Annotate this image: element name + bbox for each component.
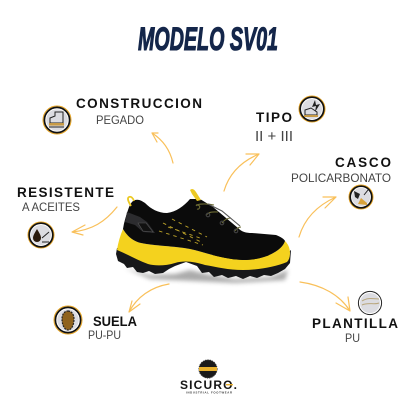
icon: toe cap impact (349, 185, 373, 209)
brand logo: sicuro (180, 360, 237, 394)
value: pu: PU (345, 333, 360, 345)
arrow: to tipo (224, 154, 259, 191)
yellow stitching (159, 219, 207, 245)
heading: casco: CASCO (335, 155, 391, 170)
arrow: to plantilla (300, 282, 350, 311)
heading: resistente: RESISTENTE (17, 185, 114, 200)
heading: suela: SUELA (93, 314, 137, 329)
yellow midsole (117, 229, 290, 270)
black outsole with lugs (116, 248, 291, 279)
arrow: to casco (299, 197, 336, 237)
heading: plantilla: PLANTILLA (312, 316, 398, 331)
feature: resistente (17, 185, 117, 248)
logo accent bar (226, 384, 233, 385)
logo emblem (199, 360, 217, 378)
value: pegado: PEGADO (96, 115, 144, 127)
heading: construccion: CONSTRUCCION (76, 96, 202, 111)
heading: tipo: TIPO (256, 110, 292, 125)
feature: suela (54, 284, 169, 342)
icon: boot sole (54, 306, 82, 334)
feature: tipo (224, 96, 325, 191)
icon: boot construction (43, 106, 71, 134)
arrow: to suela (129, 284, 169, 312)
shoe shadow (125, 268, 288, 283)
value: a aceites: A ACEITES (22, 202, 80, 214)
logo wordmark: SICURO. (180, 378, 237, 392)
laces and eyelets (196, 204, 241, 233)
feature: casco (291, 155, 391, 237)
value: pu-pu: PU-PU (88, 330, 121, 342)
arrow: to resistente (72, 207, 117, 235)
arrow: to construccion (152, 133, 173, 163)
feature: construccion (43, 96, 202, 163)
heel pull loop (128, 197, 134, 206)
tongue loop (190, 189, 201, 201)
black upper (123, 199, 285, 260)
grey heel panel (125, 212, 155, 233)
value: II + III: II + III (255, 128, 293, 145)
title: MODELO SV01 (138, 21, 278, 57)
value: policarbonato: POLICARBONATO (291, 173, 391, 185)
safety shoe illustration (116, 189, 291, 283)
logo tagline: INDUSTRIAL FOOTWEAR (186, 390, 232, 394)
icon: electric hazard shoe (299, 96, 325, 122)
icon: insole (358, 291, 382, 315)
feature: plantilla (300, 282, 398, 345)
icon: oil drop (28, 222, 54, 248)
heel panel highlight (138, 223, 153, 232)
